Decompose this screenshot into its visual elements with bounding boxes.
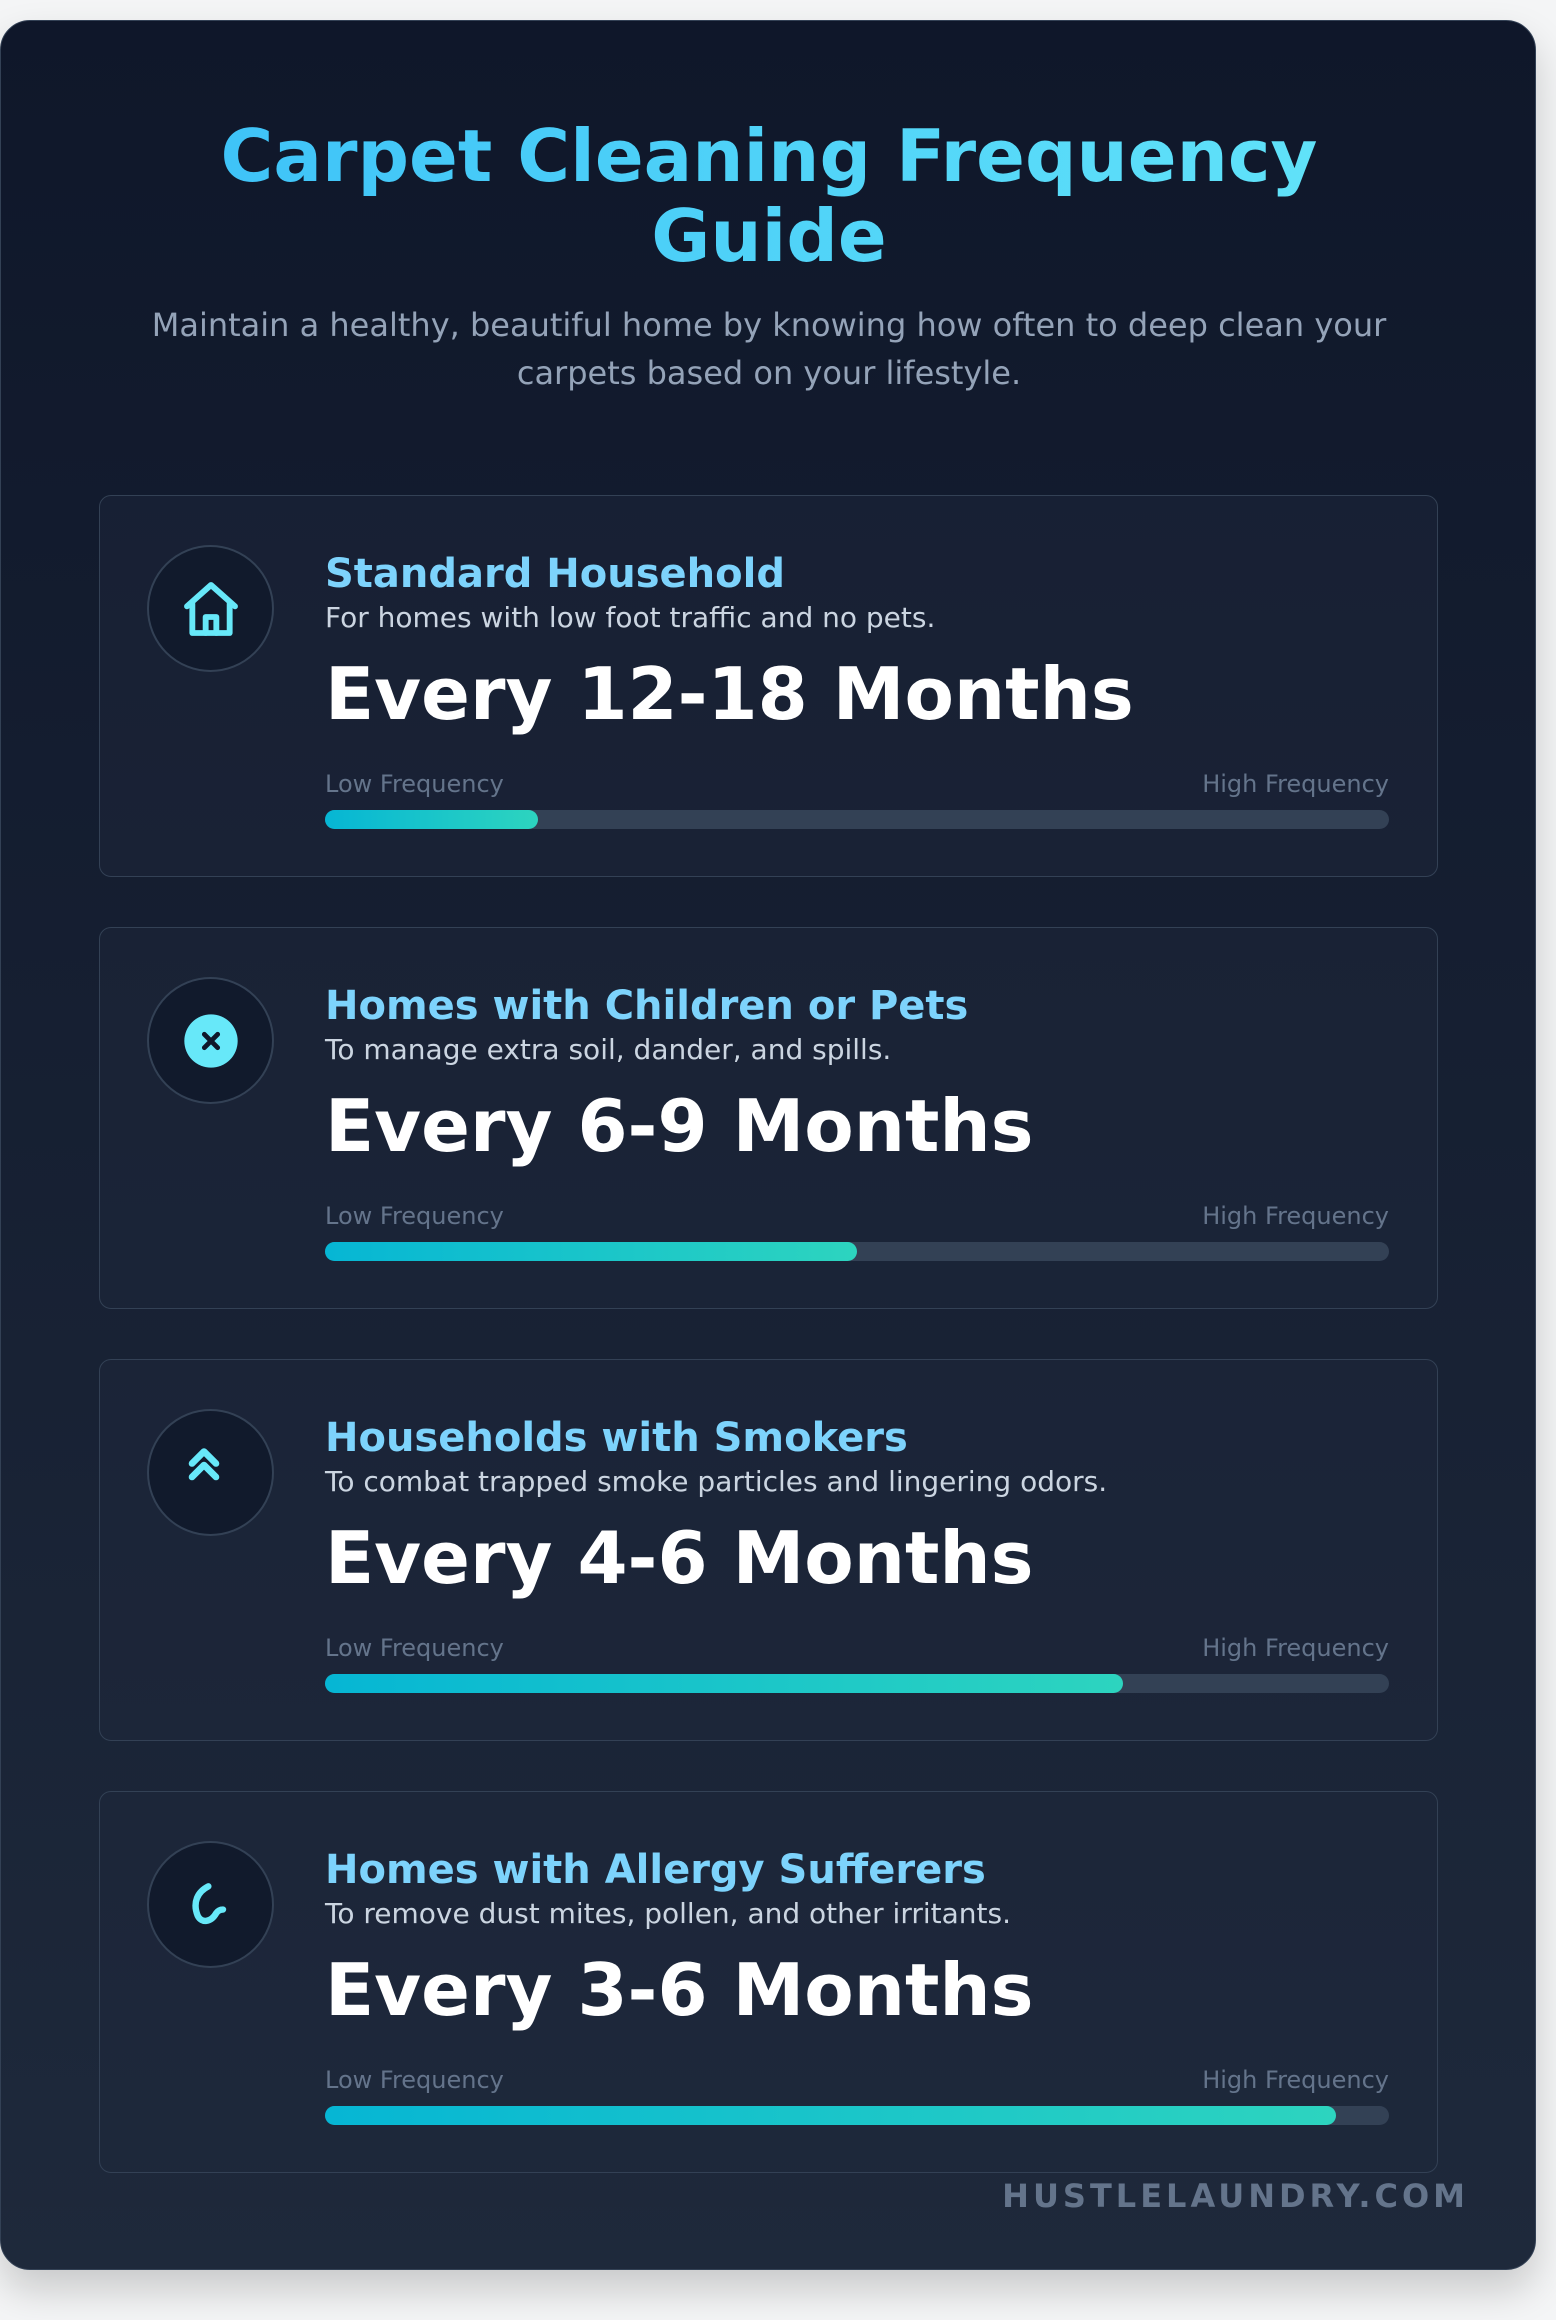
scale labels bbox=[325, 2066, 1389, 2094]
panel: smokers bbox=[99, 1359, 1438, 1741]
subtitle bbox=[152, 306, 1386, 392]
heading: Households with Smokers bbox=[325, 1415, 908, 1461]
scale labels bbox=[325, 1202, 1389, 1230]
subtitle: carpets based on your lifestyle. bbox=[517, 354, 1021, 392]
progress bar bbox=[325, 810, 1389, 829]
progress bar bbox=[325, 2106, 1389, 2125]
description: To combat trapped smoke particles and lingering odors. bbox=[325, 1465, 1107, 1498]
heading: Standard Household bbox=[325, 551, 785, 597]
frequency: Every 12-18 Months bbox=[325, 652, 1134, 736]
panel: allergy sufferers bbox=[99, 1791, 1438, 2173]
icon: double chevron bbox=[147, 1409, 274, 1536]
title: Carpet Cleaning Frequency bbox=[221, 114, 1317, 198]
icon: swirl bbox=[147, 1841, 274, 1968]
panel: smokers: Low Frequency bbox=[325, 1634, 504, 1662]
panel: children or pets: Low Frequency bbox=[325, 1202, 504, 1230]
panel: children or pets bbox=[99, 927, 1438, 1309]
frequency: Every 3-6 Months bbox=[325, 1948, 1034, 2032]
icon: x circle bbox=[147, 977, 274, 1104]
subtitle: Maintain a healthy, beautiful home by knowing how often to deep clean your bbox=[152, 306, 1386, 344]
description: To remove dust mites, pollen, and other irritants. bbox=[325, 1897, 1011, 1930]
frequency: Every 6-9 Months bbox=[325, 1084, 1034, 1168]
icon: house bbox=[147, 545, 274, 672]
scale labels bbox=[325, 1634, 1389, 1662]
panel: allergy sufferers: High Frequency bbox=[1202, 2066, 1389, 2094]
description: For homes with low foot traffic and no pets. bbox=[325, 601, 935, 634]
panel: allergy sufferers: Low Frequency bbox=[325, 2066, 504, 2094]
scale labels bbox=[325, 770, 1389, 798]
panel: standard household: High Frequency bbox=[1202, 770, 1389, 798]
footer brand: HUSTLELAUNDRY.COM bbox=[1002, 2177, 1469, 2215]
panel: standard household bbox=[99, 495, 1438, 877]
heading: Homes with Allergy Sufferers bbox=[325, 1847, 986, 1893]
heading: Homes with Children or Pets bbox=[325, 983, 968, 1029]
title: Guide bbox=[651, 194, 887, 278]
description: To manage extra soil, dander, and spills. bbox=[325, 1033, 891, 1066]
progress bar bbox=[325, 1242, 1389, 1261]
title bbox=[1, 116, 1537, 276]
panel: standard household: Low Frequency bbox=[325, 770, 504, 798]
frequency: Every 4-6 Months bbox=[325, 1516, 1034, 1600]
progress bar bbox=[325, 1674, 1389, 1693]
panel: smokers: High Frequency bbox=[1202, 1634, 1389, 1662]
panel: children or pets: High Frequency bbox=[1202, 1202, 1389, 1230]
